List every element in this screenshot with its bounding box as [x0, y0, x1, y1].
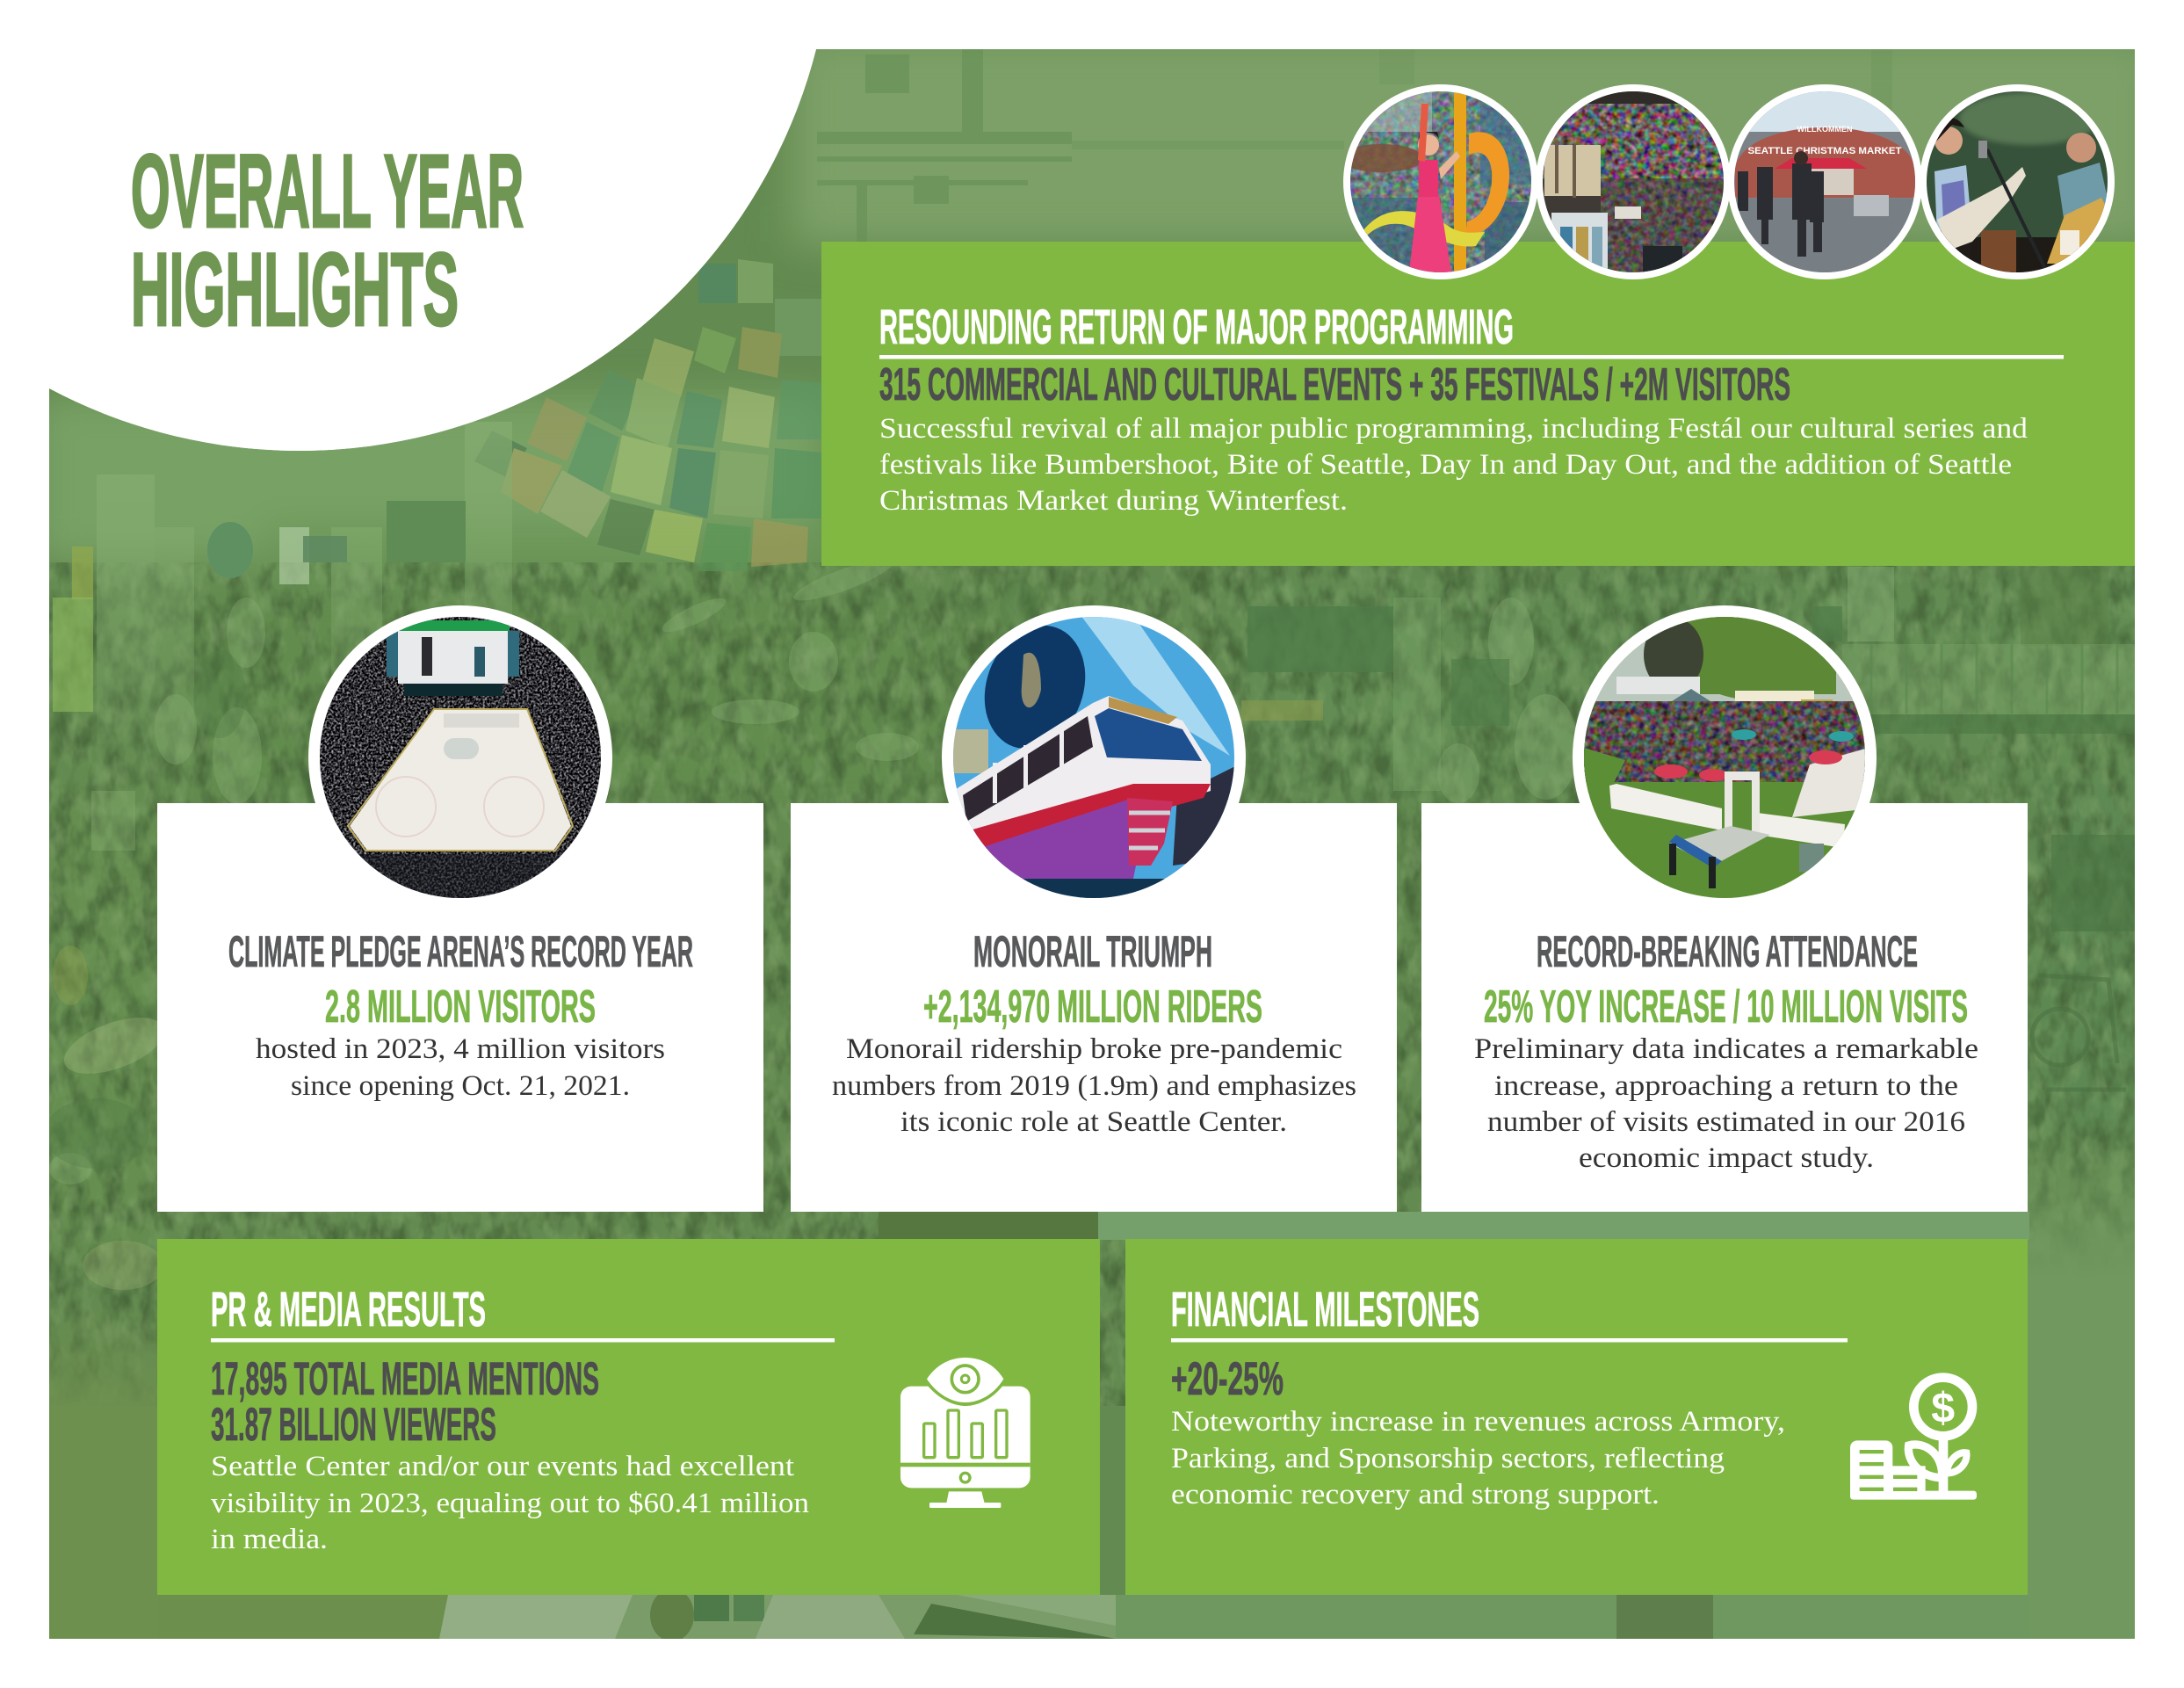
body text: Christmas Market during Winterfest.	[879, 485, 1348, 517]
body text: hosted in 2023, 4 million visitors	[256, 1033, 665, 1065]
body text: Preliminary data indicates a remarkable	[1474, 1033, 1978, 1065]
statistics: 31.87 BILLION VIEWERS	[211, 1399, 496, 1451]
icon: monitor with eye and bar chart	[900, 1358, 1031, 1508]
dark structures among the crowd	[1241, 567, 2135, 931]
body text: Noteworthy increase in revenues across Armory,	[1171, 1406, 1785, 1438]
panel: PR and media results	[157, 1239, 1100, 1595]
body text	[879, 413, 2029, 517]
panel: financial milestones	[1125, 1239, 2028, 1595]
body text: numbers from 2019 (1.9m) and emphasizes	[832, 1070, 1356, 1102]
card: Monorail Triumph	[791, 605, 1397, 1212]
card: Climate Pledge Arena	[157, 605, 763, 1212]
body text: festivals like Bumbershoot, Bite of Seattle, Day In and Day Out, and the addition of Seattle	[879, 449, 2012, 481]
title: HIGHLIGHTS	[131, 232, 459, 348]
exhibits along the bottom	[439, 1595, 1713, 1639]
photo: festival crowd on lawn	[1573, 605, 1877, 909]
statistic: 2.8 MILLION VISITORS	[325, 982, 596, 1032]
body text	[211, 1451, 809, 1555]
lower-left and right flat tones	[49, 1125, 2135, 1643]
card: Record-Breaking Attendance	[1421, 605, 2028, 1212]
body text: Monorail ridership broke pre-pandemic	[846, 1033, 1342, 1065]
bunting flags hanging above the crowd	[474, 259, 821, 571]
body text: number of visits estimated in our 2016	[1487, 1106, 1965, 1138]
body text: Seattle Center and/or our events had excellent	[211, 1451, 794, 1482]
photo: arena ice rink	[308, 605, 612, 909]
body text: economic recovery and strong support.	[1171, 1479, 1660, 1511]
body text	[832, 1033, 1356, 1138]
heading: MONORAIL TRIUMPH	[973, 927, 1212, 976]
photo: Seattle Christmas Market entrance: SEATTLE CHRISTMAS MARKET	[1748, 146, 1902, 156]
icon: money plant and coin stacks: $	[1931, 1384, 1955, 1431]
body text	[256, 1033, 665, 1102]
body text	[1474, 1033, 1978, 1174]
title	[131, 134, 524, 348]
icon: money plant and coin stacks	[1850, 1378, 1977, 1500]
text: OVERALL YEAR	[131, 134, 524, 250]
heading: FINANCIAL MILESTONES	[1171, 1281, 1479, 1337]
photo: band performing on stage	[1920, 84, 2115, 279]
wheelchair silhouette lower right	[2032, 975, 2126, 1090]
statistic: +20-25%	[1171, 1353, 1284, 1405]
body text: its iconic role at Seattle Center.	[900, 1106, 1287, 1138]
body text: since opening Oct. 21, 2021.	[291, 1070, 630, 1102]
photo: Seattle Christmas Market entrance: WILLKOMMEN	[1797, 125, 1852, 134]
body text: Parking, and Sponsorship sectors, reflecting	[1171, 1443, 1725, 1474]
panel: resounding return of major programming	[821, 242, 2135, 566]
body text: visibility in 2023, equaling out to $60.41 million	[211, 1488, 809, 1519]
statistic: +2,134,970 MILLION RIDERS	[923, 982, 1262, 1032]
body text: in media.	[211, 1524, 328, 1555]
body text: increase, approaching a return to the	[1494, 1070, 1958, 1102]
body text	[1171, 1406, 1785, 1511]
heading: RESOUNDING RETURN OF MAJOR PROGRAMMING	[879, 299, 1514, 354]
statistics	[211, 1353, 599, 1451]
railing at right	[1842, 644, 2135, 734]
truss structure in the ceiling	[817, 49, 1072, 237]
statistics: 17,895 TOTAL MEDIA MENTIONS	[211, 1353, 599, 1405]
figures in the crowd	[49, 552, 1578, 1290]
columns and storefront at left	[53, 422, 512, 733]
photo: monorail train	[942, 605, 1246, 909]
heading: PR & MEDIA RESULTS	[211, 1281, 486, 1337]
body text: Successful revival of all major public programming, including Festál our cultural series and	[879, 413, 2029, 445]
body text: economic impact study.	[1579, 1142, 1874, 1174]
photo: art market hall	[1536, 84, 1731, 279]
heading: CLIMATE PLEDGE ARENA’S RECORD YEAR	[228, 927, 693, 976]
photo: Seattle Christmas Market entrance	[1727, 84, 1922, 279]
photo: cultural dancer with ribbons	[1339, 84, 1538, 279]
